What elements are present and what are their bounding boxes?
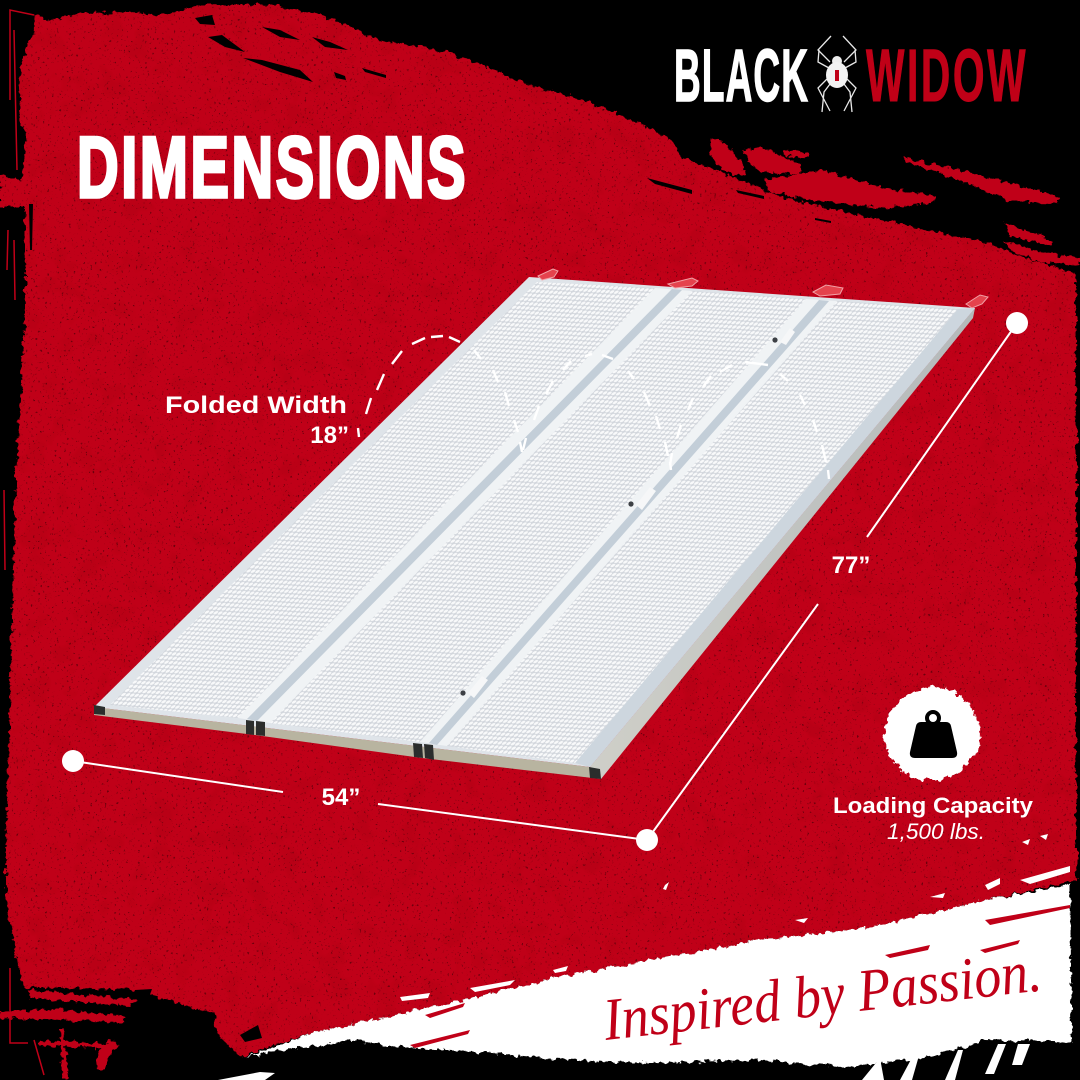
- panel: right deck: [447, 301, 958, 763]
- tagline: Inspired by Passion.: [599, 938, 1045, 1053]
- ramp product illustration: [94, 269, 988, 779]
- dashed arcs: folded width: [358, 336, 829, 479]
- dimension: width 54 inches: [62, 750, 658, 851]
- ramp front edge: [94, 707, 601, 779]
- logo: [674, 34, 1026, 117]
- dimension: width 54 inches: 54”: [322, 784, 360, 811]
- hinge rail: left: [238, 288, 692, 723]
- logo word: BLACK: BLACK: [674, 35, 808, 117]
- label: folded width: [165, 392, 349, 449]
- title: DIMENSIONS: [77, 119, 466, 216]
- black scratches over red: [29, 15, 831, 1042]
- logo word: WIDOW: WIDOW: [866, 34, 1026, 117]
- hinge rail: right: [420, 299, 837, 746]
- callout: loading capacity: Loading Capacity: [833, 793, 1034, 818]
- icon: spider: [818, 36, 856, 112]
- label: folded width: Folded Width: [165, 392, 347, 419]
- thin red frame lines at the left edge: [4, 10, 44, 1075]
- panel: centre deck: [270, 291, 806, 742]
- right side rail: [575, 308, 975, 767]
- panel: left deck: [110, 282, 655, 718]
- ramp side edge: [590, 308, 975, 779]
- callout: loading capacity: 1,500 lbs.: [887, 819, 985, 844]
- callout: loading capacity: [833, 793, 1034, 844]
- red hooks: [538, 269, 988, 308]
- label: folded width: 18”: [310, 422, 349, 449]
- square tube ends: [94, 705, 601, 779]
- hinge plates: [468, 328, 795, 698]
- icon: weight on white splat: [884, 686, 981, 780]
- white brush stroke: [218, 834, 1072, 1080]
- hinge bolts: [460, 337, 778, 696]
- dimension: length 77 inches: [647, 312, 1028, 840]
- ramp deck frame: [94, 277, 975, 767]
- dimension: length 77 inches: 77”: [832, 552, 870, 579]
